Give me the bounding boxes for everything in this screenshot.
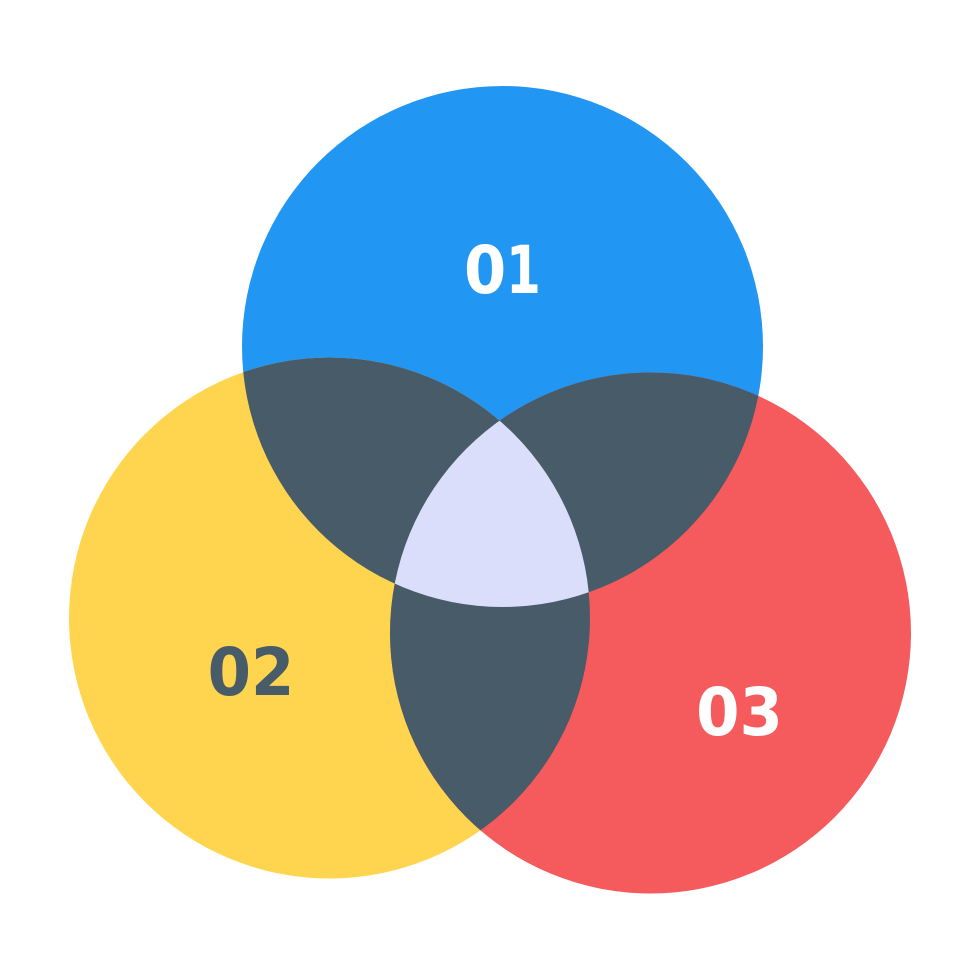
circle: blue 01: [242, 86, 763, 607]
overlap: blue and yellow: [243, 358, 589, 592]
venn diagram: [69, 86, 911, 894]
overlap: center of all three: [394, 420, 589, 607]
label 02: 02: [208, 634, 294, 711]
overlap: blue and red: [500, 372, 758, 592]
label 03: 03: [696, 674, 783, 751]
overlap: yellow and red: [390, 584, 590, 830]
label 01: [464, 232, 541, 309]
label 01: 1: [506, 232, 541, 309]
circle: yellow 02: [69, 358, 590, 878]
circle: red 03: [390, 372, 911, 894]
label 01: 0: [464, 232, 506, 309]
